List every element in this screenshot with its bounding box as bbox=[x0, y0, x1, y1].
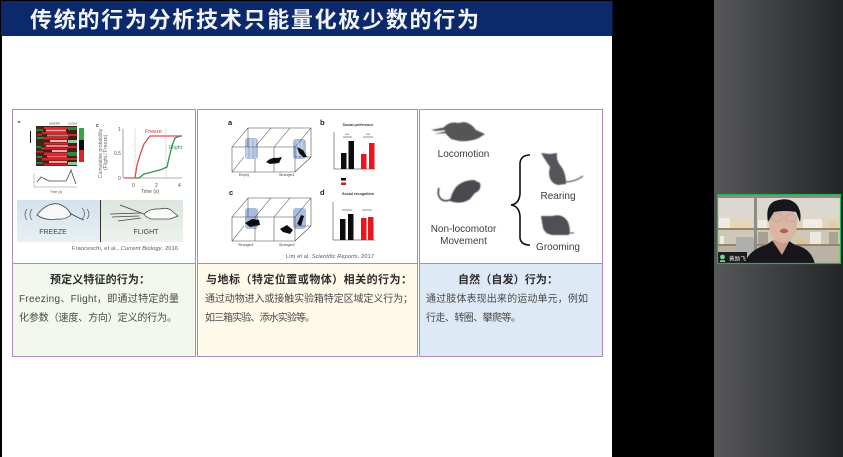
title: 传统的行为分析技术只能量化极少数的行为 bbox=[30, 8, 479, 32]
heatmap chart bbox=[18, 119, 84, 166]
cumulative probability chart: Freeze bbox=[145, 129, 162, 135]
citation: Lim et al. Scientific Reports, 2017 bbox=[286, 254, 374, 260]
cumulative probability chart: c bbox=[96, 123, 99, 129]
body text: 通过肢体表现出来的运动单元，例如 bbox=[426, 292, 588, 305]
social preference bar chart b: *** bbox=[345, 133, 350, 137]
heading: 与地标（特定位置或物体）相关的行为： bbox=[206, 272, 412, 286]
social recognition bar chart d: Social recognition bbox=[342, 192, 375, 196]
social preference bar chart b bbox=[320, 118, 375, 185]
gray side panel bbox=[714, 0, 843, 457]
label: non-locomotor movement: Movement bbox=[440, 236, 487, 247]
icon: grooming rat bbox=[541, 215, 574, 235]
cumulative probability chart: 1 bbox=[118, 127, 121, 133]
illustration: freeze: FREEZE bbox=[39, 229, 67, 236]
panel: spontaneous behaviours bbox=[420, 110, 602, 356]
illustration: freeze bbox=[17, 200, 100, 242]
heading: 自然（自发）行为： bbox=[458, 272, 558, 286]
icon: rearing rat bbox=[541, 153, 583, 185]
icon: non-locomotor rat bbox=[438, 180, 480, 203]
label: locomotion: Locomotion bbox=[438, 149, 489, 160]
three-chamber diagram a: Stranger1 bbox=[279, 173, 295, 177]
label: non-locomotor movement: Non-locomotor bbox=[431, 224, 497, 235]
cumulative probability chart: 0 bbox=[132, 183, 135, 189]
three-chamber diagram a: Empty bbox=[239, 173, 249, 177]
black presentation margin bbox=[612, 0, 714, 457]
heatmap chart: a bbox=[18, 119, 21, 124]
social recognition bar chart d bbox=[320, 188, 375, 240]
social preference bar chart b: *** bbox=[366, 133, 371, 137]
cumulative probability chart: (Flight / Freeze) bbox=[103, 134, 109, 170]
heatmap chart: LOOM bbox=[68, 122, 77, 126]
video thumbnail: speaker bbox=[718, 194, 840, 264]
three-chamber diagram a: a bbox=[228, 118, 233, 127]
active speaker border bbox=[718, 194, 840, 264]
cumulative probability chart: 4 bbox=[178, 183, 181, 189]
body text: 通过动物进入或接触实验箱特定区域定义行为； bbox=[205, 292, 413, 305]
panel: predefined behaviours bbox=[12, 110, 196, 356]
brace bbox=[511, 155, 530, 245]
three-chamber diagram c: Stranger2 bbox=[279, 243, 295, 247]
heading: 预定义特征的行为： bbox=[50, 272, 150, 286]
body text: 如三箱实验、添水实验等。 bbox=[205, 311, 315, 324]
speaker name tag: 黄励飞 bbox=[729, 254, 746, 262]
illustration: flight: FLIGHT bbox=[134, 229, 159, 236]
text box: spontaneous behaviours bbox=[420, 264, 602, 356]
text box: predefined behaviours bbox=[12, 264, 196, 356]
bookshelves bbox=[718, 195, 840, 264]
speaker figure bbox=[744, 199, 815, 264]
cumulative probability chart bbox=[96, 123, 183, 195]
body text: Freezing、Flight，即通过特定的量 bbox=[19, 292, 179, 305]
three-chamber diagram c bbox=[229, 188, 311, 247]
label: rearing: Rearing bbox=[540, 191, 576, 202]
heatmap chart: SWEEP bbox=[49, 122, 60, 126]
speed line chart: Time (s) bbox=[50, 190, 62, 194]
cumulative probability chart: 0.5 bbox=[114, 151, 121, 157]
body text: 行走、转圈、攀爬等。 bbox=[426, 311, 521, 324]
panel: landmark-related behaviours bbox=[198, 110, 418, 356]
speed line chart bbox=[34, 170, 77, 194]
three-chamber diagram c: Stranger1 bbox=[238, 243, 254, 247]
text box: landmark-related behaviours bbox=[198, 264, 418, 356]
panel figure frame bbox=[198, 110, 418, 264]
social preference bar chart b: b bbox=[320, 118, 325, 127]
label: grooming: Grooming bbox=[536, 242, 580, 253]
title bar bbox=[1, 1, 612, 36]
cumulative probability chart: 2 bbox=[155, 183, 158, 189]
cumulative probability chart: Time (s) bbox=[141, 189, 159, 195]
panel figure frame bbox=[12, 110, 196, 264]
slide background bbox=[2, 1, 612, 457]
cumulative probability chart: Flight bbox=[169, 145, 183, 151]
citation: Franceschi, et al., Current Biology, 2016 bbox=[72, 246, 178, 252]
three-chamber diagram a bbox=[228, 118, 311, 177]
social recognition bar chart d: d bbox=[320, 188, 325, 197]
body text: 化参数（速度、方向）定义的行为。 bbox=[19, 311, 177, 324]
social preference bar chart b: Social preference bbox=[343, 123, 373, 127]
cumulative probability chart: 0 bbox=[118, 176, 121, 182]
icon: locomotion rats bbox=[431, 122, 485, 141]
panel figure frame bbox=[420, 110, 602, 264]
three-chamber diagram c: c bbox=[229, 188, 233, 197]
cumulative probability chart: Cumulative probability bbox=[98, 128, 104, 178]
illustration: flight bbox=[100, 200, 183, 242]
